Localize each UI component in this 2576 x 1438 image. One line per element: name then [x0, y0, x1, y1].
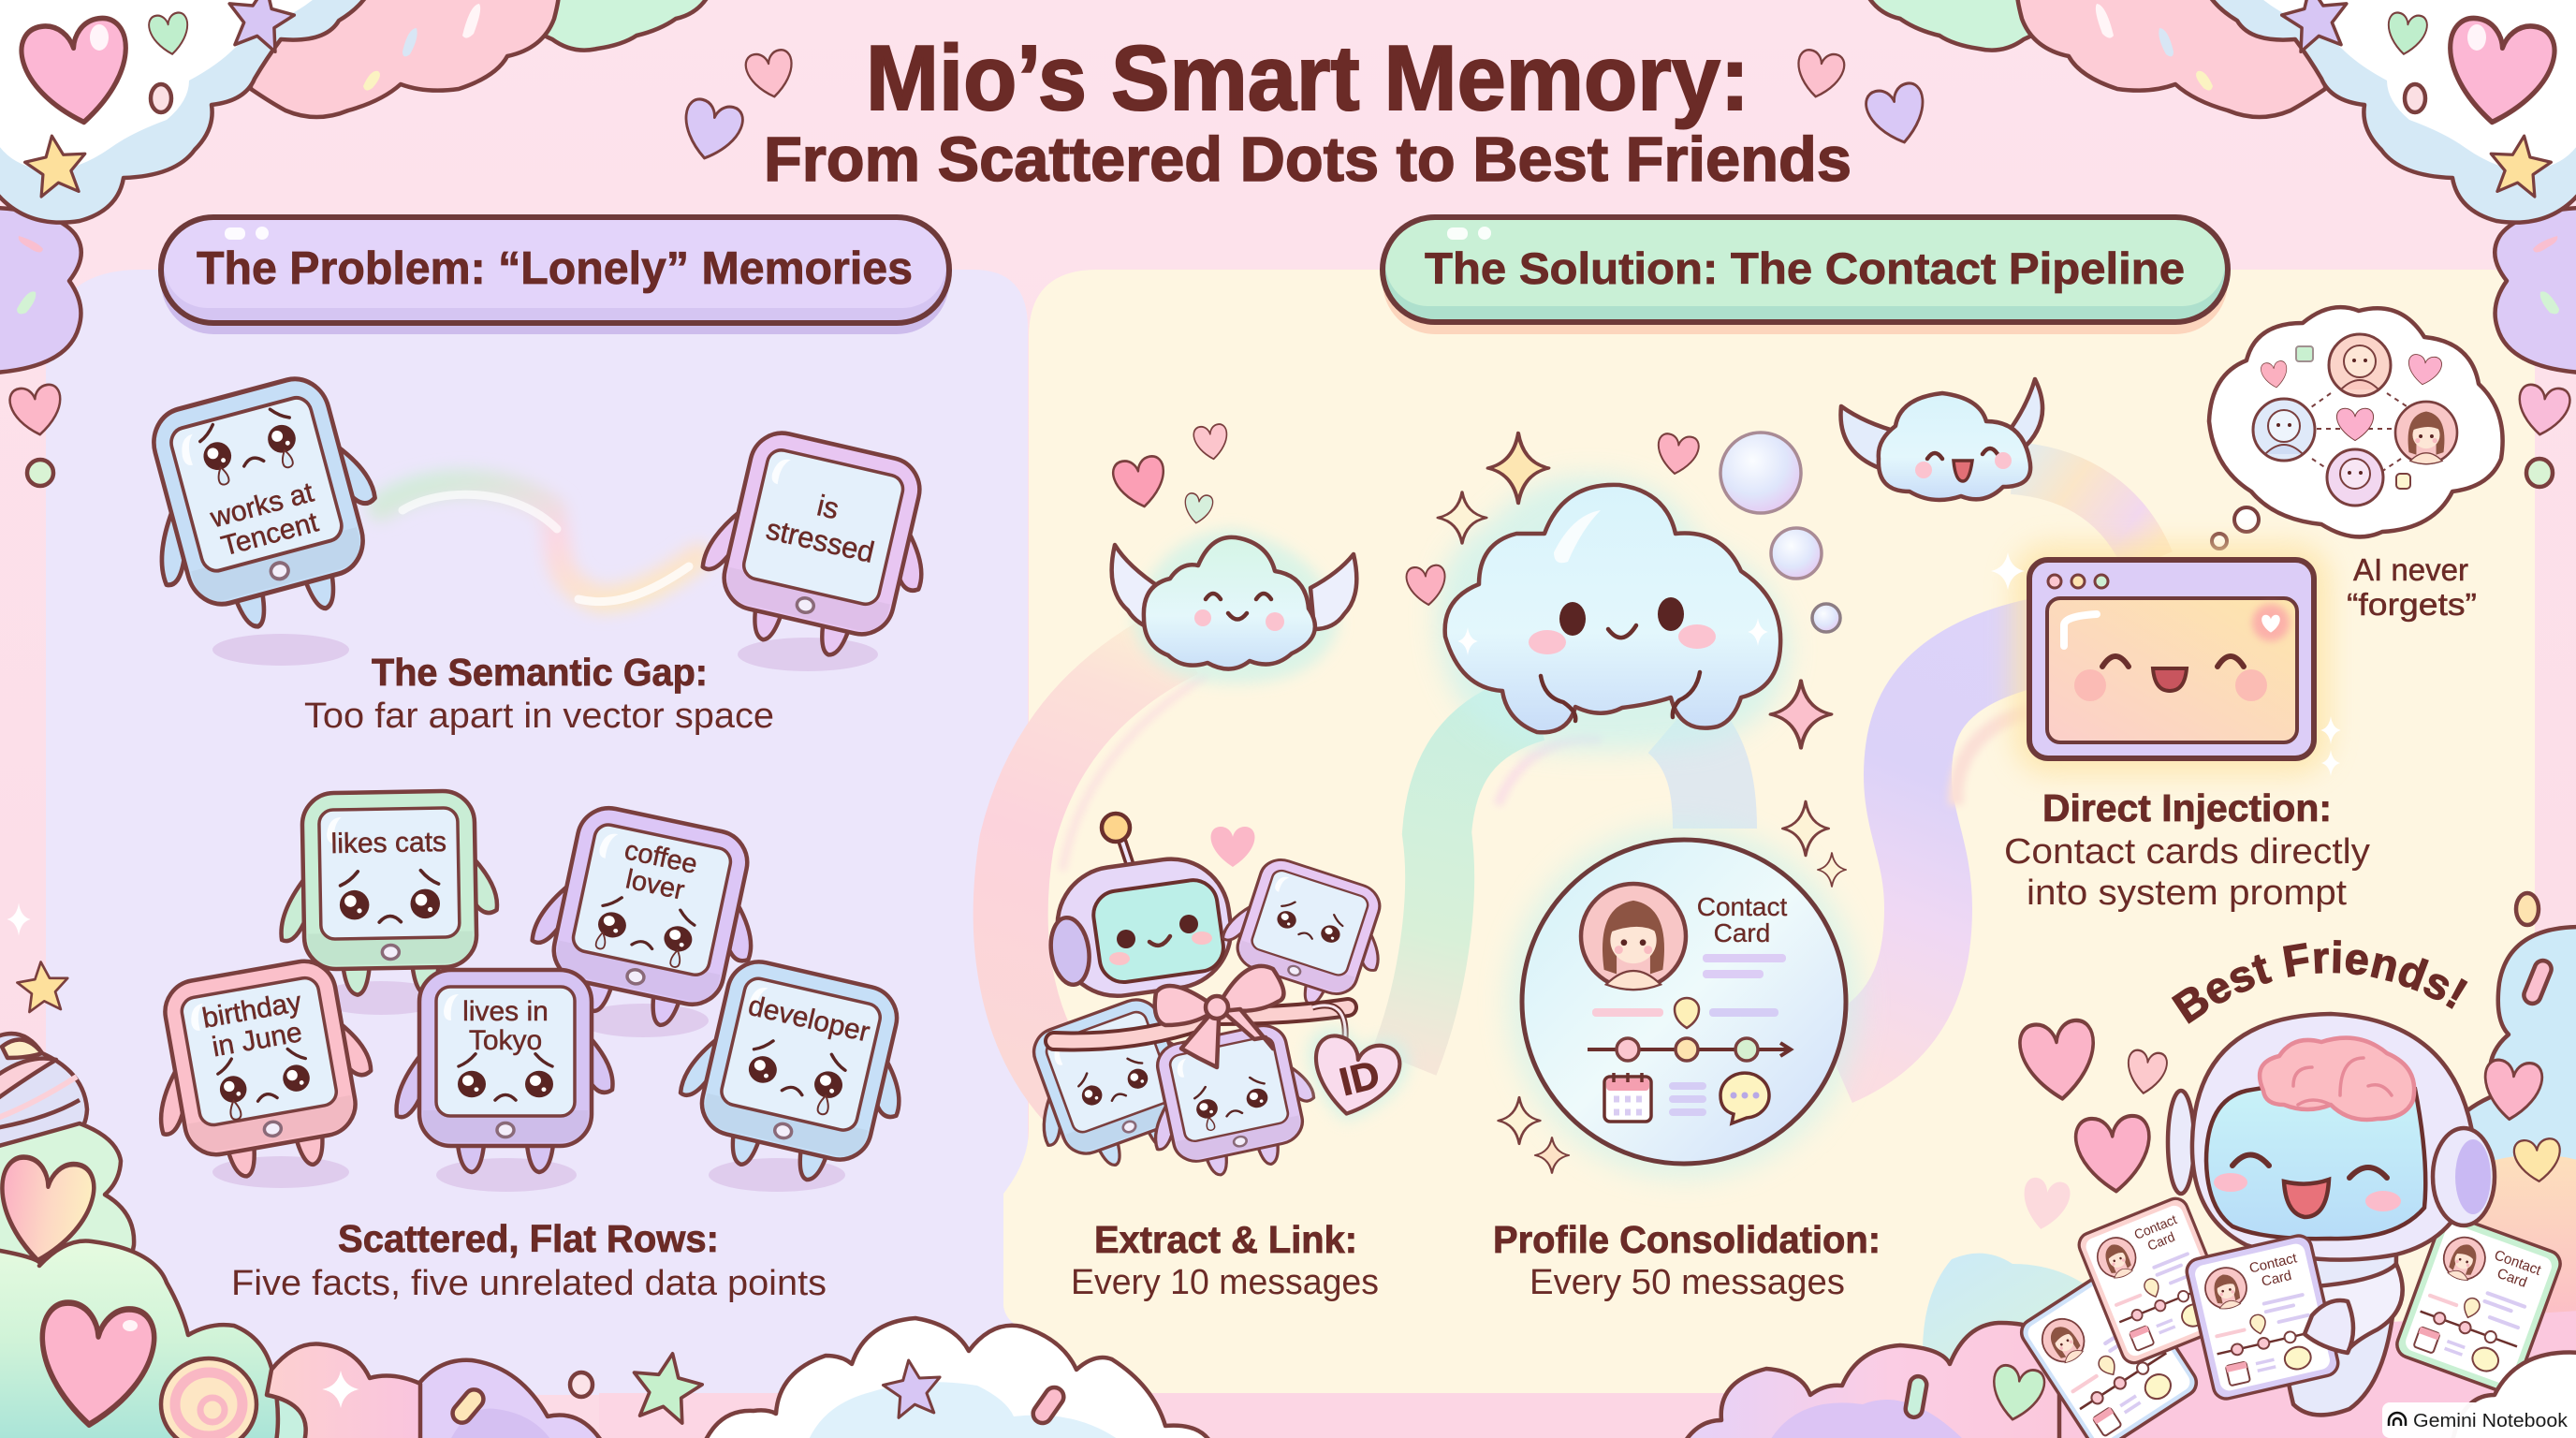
ribbon and bow — [1054, 966, 1348, 1067]
title hearts — [677, 49, 1932, 165]
avatar: left friend — [2253, 399, 2315, 461]
contact card title — [1697, 892, 1787, 947]
calendar — [1604, 1073, 1651, 1122]
sky blue cloud — [1923, 1254, 2115, 1367]
caption: semantic gap — [304, 651, 774, 736]
green back cloud — [0, 1123, 134, 1259]
purple star — [880, 1357, 944, 1419]
thought bubble: friend network — [2209, 307, 2503, 549]
caption: direct injection — [2004, 786, 2370, 913]
contact card back: Contact — [2131, 1211, 2179, 1242]
card field rows — [1592, 954, 1786, 1028]
contact card title: Card — [1714, 918, 1770, 947]
sparkles around contact bubble — [1499, 801, 1846, 1173]
title — [764, 26, 1852, 195]
lollipop — [161, 1358, 256, 1438]
heading text: solution: The Solution: The Contact Pipeline — [1425, 243, 2185, 293]
tablet: lives in Tokyo: lives in — [462, 996, 549, 1027]
caption: direct injection: Contact cards directly — [2004, 832, 2370, 872]
tablet: birthday in June — [138, 953, 386, 1189]
heading text: problem: The Problem: “Lonely” Memories — [197, 243, 913, 294]
lavender tablet — [1136, 1018, 1325, 1187]
contact card right: Card — [2495, 1266, 2529, 1291]
pink cloud — [267, 1344, 420, 1438]
tablet: lives in Tokyo — [397, 970, 612, 1172]
contact card front: Card — [2261, 1269, 2293, 1290]
purple cloud — [402, 1360, 602, 1438]
sparkles and bubbles around big cloud — [1405, 433, 1840, 748]
tablet: lives in Tokyo: Tokyo — [469, 1025, 542, 1056]
caption: scattered flat rows — [231, 1217, 827, 1303]
face — [2232, 1155, 2387, 1178]
tablet: birthday in June: in June — [210, 1017, 304, 1063]
subtitle: From Scattered Dots to Best Friends — [764, 125, 1852, 195]
pink floor band — [599, 1393, 1760, 1438]
caption: direct injection: Direct Injection: — [2042, 786, 2332, 829]
icon: small winged cloud left — [1112, 529, 1356, 683]
floating hearts — [2018, 1019, 2562, 1233]
tablet: works at Tencent — [123, 366, 400, 647]
tablet: likes cats — [279, 790, 499, 996]
tablet: coffee lover: coffee — [622, 835, 700, 880]
text bars — [1669, 1082, 1706, 1116]
tablet: coffee lover — [520, 798, 774, 1040]
tablet: is stressed: is — [814, 489, 842, 526]
tablet: developer — [667, 950, 924, 1196]
side peach cloud — [2424, 1154, 2576, 1348]
brain — [2260, 1038, 2414, 1120]
caption: scattered flat rows: Five facts, five unrelated data points — [231, 1264, 827, 1303]
tablet shadows — [212, 634, 878, 1192]
contact card front: Contact — [2248, 1251, 2299, 1277]
green star — [627, 1347, 707, 1426]
tablet: birthday in June: birthday — [200, 987, 303, 1034]
purple tablet — [1211, 849, 1399, 1020]
icon: small winged cloud right — [1841, 379, 2042, 500]
robot head — [1041, 852, 1238, 1005]
caption: scattered flat rows: Scattered, Flat Rows: — [338, 1217, 719, 1260]
robot antenna — [1102, 814, 1130, 864]
capsule — [448, 1386, 488, 1427]
green front cloud — [0, 1241, 278, 1438]
panel: solution background — [1003, 270, 2535, 1393]
contact card front — [2185, 1233, 2340, 1401]
tablet: is stressed — [690, 421, 946, 671]
tablet: coffee lover: lover — [623, 864, 687, 906]
blue side cloud — [2452, 927, 2576, 1217]
annotation: AI never forgets — [2347, 552, 2477, 622]
contact card title: Contact — [1697, 892, 1787, 921]
semantic gap rainbow link — [381, 483, 698, 602]
caption: profile consolidation: Every 50 messages — [1530, 1263, 1845, 1302]
robot hand — [2305, 1300, 2353, 1353]
icon: glowing browser window — [1991, 543, 2341, 776]
annotation: AI never forgets: AI never — [2353, 552, 2468, 587]
contact card back: Card — [2145, 1228, 2177, 1254]
icon: robot with tied tablets — [1011, 814, 1412, 1187]
top corner decoration left — [0, 0, 709, 373]
icon: big cloud — [1437, 477, 1790, 751]
white cloud corner — [2452, 1353, 2576, 1438]
tablet: works at Tencent: works at — [207, 477, 317, 535]
timeline — [1588, 1038, 1791, 1061]
tablet: works at Tencent: Tencent — [218, 506, 322, 563]
watermark: Gemini Notebook — [2382, 1402, 2576, 1438]
caption: semantic gap: Too far apart in vector space — [304, 697, 774, 736]
rainbow heart behind — [0, 1154, 97, 1267]
caption: profile consolidation: Profile Consolidation: — [1493, 1218, 1881, 1261]
robot helmet and face — [2168, 1014, 2495, 1260]
panel: problem background — [46, 270, 1028, 1395]
caption: extract and link — [1071, 1218, 1379, 1302]
teal candy — [262, 1393, 314, 1438]
side decorations — [7, 383, 2571, 1013]
annotation: AI never forgets: “forgets” — [2347, 587, 2477, 622]
tablet: is stressed: stressed — [763, 512, 877, 569]
caption: profile consolidation — [1493, 1218, 1881, 1302]
rainbow pipeline ribbons — [1011, 468, 2148, 1119]
headphone — [2433, 1128, 2495, 1225]
heart ID tag — [1295, 1005, 1412, 1132]
tablet: likes cats: likes cats — [330, 827, 446, 859]
blue tablet — [1011, 988, 1217, 1184]
pill: solution heading — [1383, 217, 2228, 334]
hearts near left cloud — [1111, 423, 1230, 525]
top corner decoration right — [1867, 0, 2576, 373]
big pink heart — [34, 1300, 157, 1431]
bottom left decoration — [0, 1034, 1210, 1438]
avatar — [1581, 884, 1686, 990]
caption: direct injection: into system prompt — [2027, 873, 2347, 913]
caption: extract and link: Every 10 messages — [1071, 1263, 1379, 1302]
watermark: Gemini Notebook: Gemini Notebook — [2413, 1411, 2569, 1431]
title: Mio’s Smart Memory: — [866, 26, 1749, 129]
caption: semantic gap: The Semantic Gap: — [372, 651, 708, 694]
icon: contact card bubble — [1506, 824, 1862, 1180]
avatar: bottom friend — [2327, 449, 2383, 506]
avatar: top friend — [2329, 334, 2391, 396]
caption: extract and link: Extract & Link: — [1094, 1218, 1357, 1261]
tablet: developer: developer — [745, 990, 872, 1049]
contact card right: Contact — [2492, 1247, 2543, 1279]
arched label: Best Friends!: Best Friends! — [2172, 940, 2467, 1024]
pink heart above robot — [1211, 827, 1254, 867]
white cloud bottom — [705, 1318, 1210, 1438]
floor clouds — [1966, 1311, 2576, 1438]
speech bubble — [1720, 1073, 1769, 1123]
robot body — [2281, 1245, 2403, 1415]
bottom right decoration — [1685, 891, 2576, 1438]
contact card far left — [2016, 1261, 2202, 1438]
contact card back — [2075, 1195, 2234, 1367]
avatar: right friend — [2395, 402, 2457, 464]
contact card right — [2393, 1212, 2564, 1396]
candy swirl — [0, 1034, 87, 1161]
pill: problem heading — [161, 217, 949, 334]
heart ID tag: ID — [1335, 1052, 1383, 1104]
